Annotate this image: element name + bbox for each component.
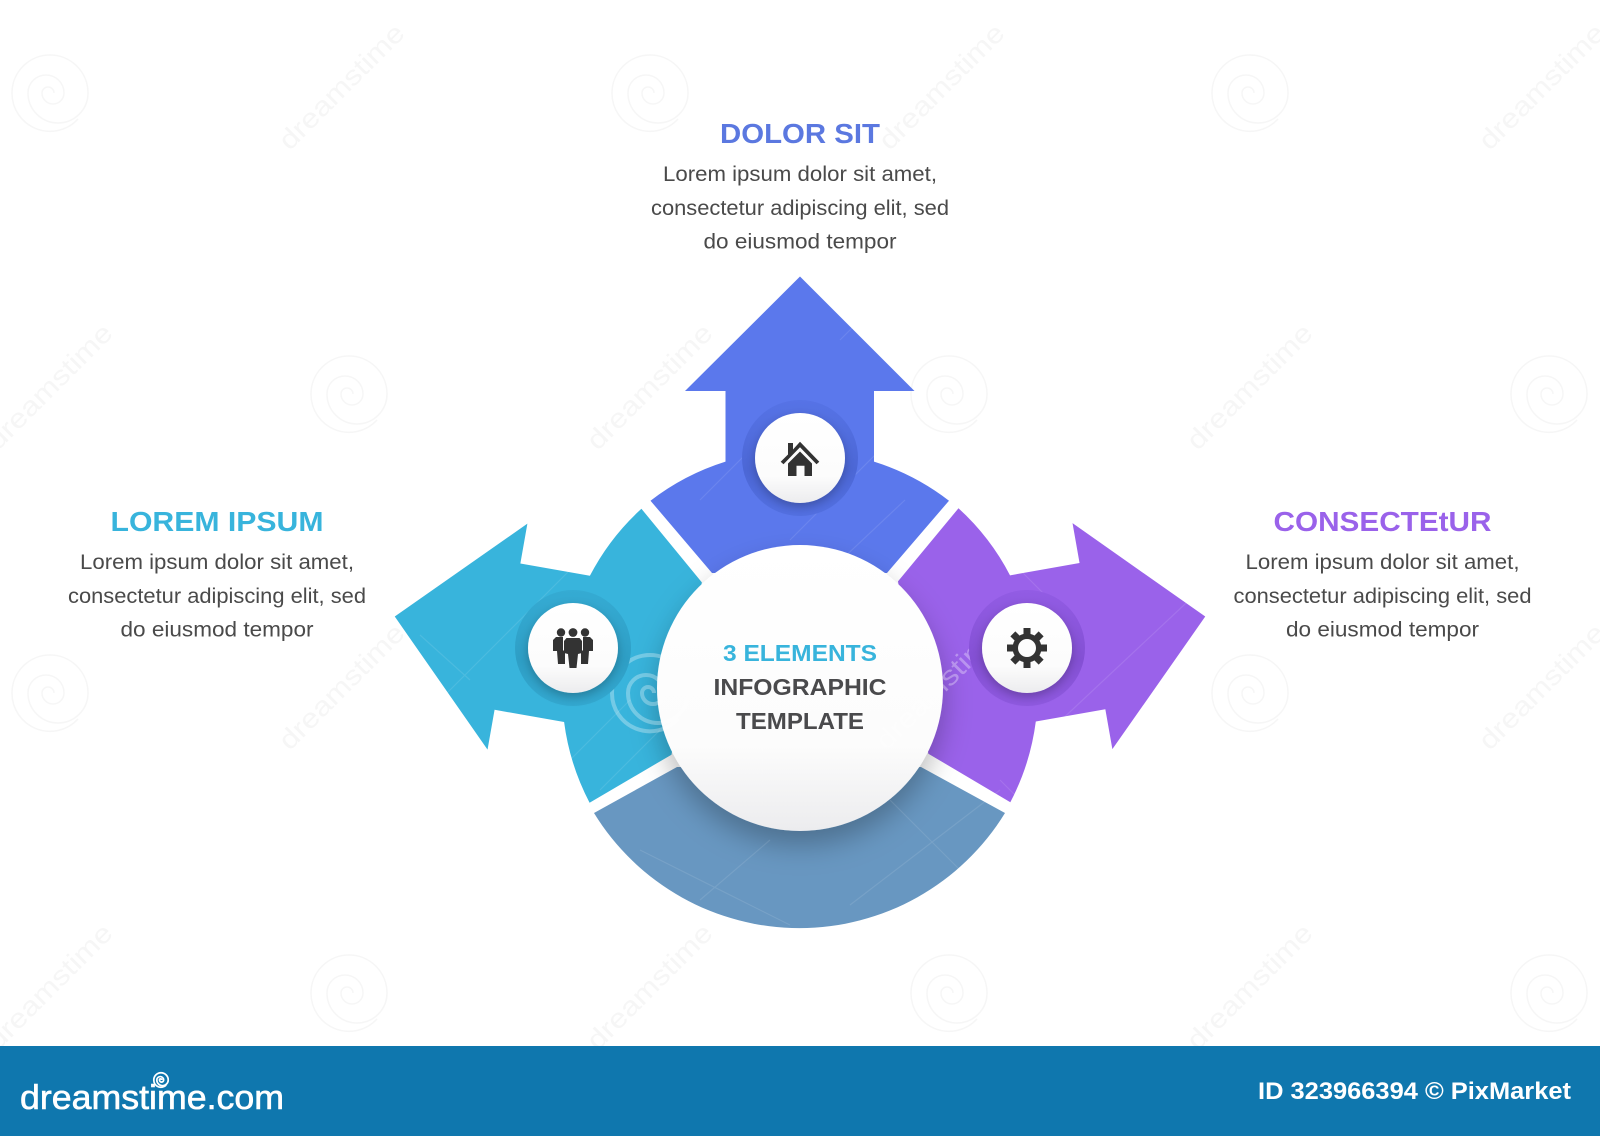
watermark: background pattern: dreamstime (1181, 918, 1319, 1056)
watermark: background pattern: dreamstime (581, 318, 719, 456)
heading: lorem ipsum: LOREM IPSUM (110, 506, 324, 537)
center title text (714, 640, 886, 734)
arrow: left cyan (369, 470, 713, 815)
watermark: background pattern: dreamstime (1473, 618, 1600, 756)
watermark: background pattern: dreamstime (273, 18, 411, 156)
body text: consectetur: do eiusmod tempor (1286, 618, 1479, 642)
bottom arc segment (594, 767, 1005, 928)
badge: people icon (515, 590, 631, 706)
center title text: 3 ELEMENTS (723, 640, 877, 666)
body text: consectetur: consectetur adipiscing elit, sed (1234, 584, 1532, 608)
arrow: right purple (887, 469, 1231, 815)
body text: lorem ipsum: Lorem ipsum dolor sit amet, (80, 550, 354, 574)
central circle (657, 545, 943, 831)
body text: lorem ipsum: consectetur adipiscing elit, sed (68, 584, 366, 608)
heading: consectetur: CONSECTEtUR (1274, 506, 1492, 537)
body text: dolor sit (651, 162, 949, 254)
footer image id: ID 323966394 © PixMarket (1258, 1078, 1571, 1105)
center title text: INFOGRAPHIC (714, 674, 886, 700)
footer band (0, 1046, 1600, 1136)
panel: left text block (68, 506, 366, 642)
panel: right text block (1234, 506, 1532, 642)
body text: consectetur (1234, 550, 1532, 642)
watermark: background pattern: dreamstime (1473, 18, 1600, 156)
watermark: overlay on shapes: dreamstime (870, 618, 1008, 756)
icon: people (553, 628, 593, 668)
body text: lorem ipsum: do eiusmod tempor (120, 618, 314, 642)
watermark: background pattern: dreamstime (581, 918, 719, 1056)
body text: lorem ipsum (68, 550, 366, 642)
body text: consectetur: Lorem ipsum dolor sit amet, (1246, 550, 1520, 574)
body text: dolor sit: consectetur adipiscing elit, sed (651, 196, 949, 220)
body text: dolor sit: do eiusmod tempor (704, 230, 896, 254)
watermark: background pattern: dreamstime (873, 18, 1011, 156)
watermark: background pattern: dreamstime (273, 618, 411, 756)
arrow: top blue (650, 276, 949, 573)
body text: dolor sit: Lorem ipsum dolor sit amet, (663, 162, 937, 186)
heading: dolor sit: DOLOR SIT (720, 118, 880, 149)
watermark: background pattern: dreamstime (1181, 318, 1319, 456)
icon: gear (1007, 628, 1047, 668)
footer logo: dreamstime.com: dreamstime.com (20, 1079, 284, 1117)
panel: top text block (651, 118, 949, 254)
watermark: overlay on shapes (420, 285, 1200, 925)
center title text: TEMPLATE (736, 708, 864, 734)
icon: house (781, 442, 819, 476)
badge: house icon (742, 400, 858, 516)
badge: gear icon (969, 590, 1085, 706)
